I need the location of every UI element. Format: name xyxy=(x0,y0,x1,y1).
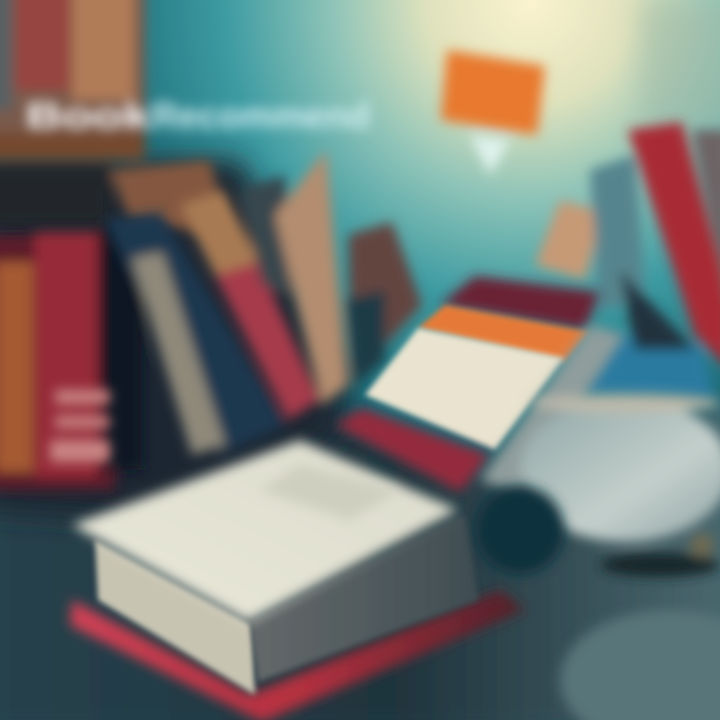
grey edge xyxy=(480,325,625,495)
title xyxy=(26,95,370,136)
panel: large open book in foreground xyxy=(70,440,525,720)
background: right edge tone xyxy=(640,0,720,130)
panel: leaning book row xyxy=(0,150,422,490)
page shading xyxy=(260,465,400,520)
callout: orange speech bubble xyxy=(441,50,545,175)
orange page band xyxy=(418,305,590,362)
panel: top-left shelf with books xyxy=(0,0,230,235)
cream page xyxy=(365,328,565,450)
icon: dark ball xyxy=(476,486,564,574)
panel: tilted open book xyxy=(335,276,625,495)
title: Book xyxy=(26,95,152,136)
red cover xyxy=(70,590,525,720)
right page edges xyxy=(250,515,478,682)
panel: globe and desk objects xyxy=(520,394,720,720)
background: table surface xyxy=(0,400,720,720)
panel: spine label on red book xyxy=(50,390,110,462)
left page edges xyxy=(95,540,255,695)
title: Recommend xyxy=(152,95,370,136)
panel: right background books xyxy=(535,122,720,398)
red band xyxy=(335,408,490,492)
panel: dark mass behind book row xyxy=(0,160,350,520)
top page xyxy=(72,440,458,622)
dark red cover edge xyxy=(440,276,600,330)
